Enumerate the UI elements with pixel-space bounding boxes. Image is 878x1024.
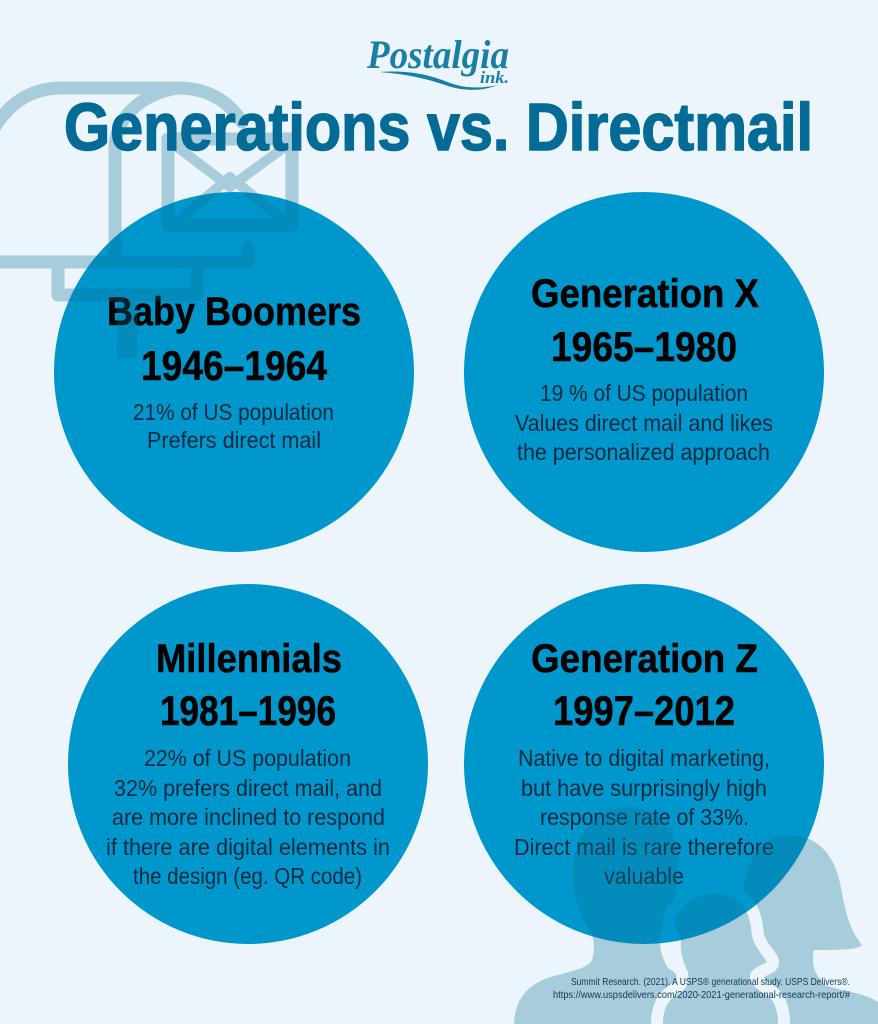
text: Generation Z facts: response rate of 33%. [540, 804, 749, 830]
heading: Baby Boomers: Baby Boomers [107, 290, 361, 334]
icon: family silhouettes [514, 807, 878, 1024]
heading: Millennials: Millennials [156, 637, 342, 681]
icon: woman silhouette right [744, 835, 878, 1024]
years: 1981–1996: 1981–1996 [160, 687, 336, 734]
logo: Postalgia ink.: ink. [480, 68, 509, 87]
text: Millennials facts: if there are digital elements in [106, 834, 390, 860]
text: Generation Z facts: valuable [604, 863, 684, 889]
citation [553, 976, 850, 1001]
panel: Millennials [68, 584, 428, 944]
text: Generation X facts [515, 380, 773, 465]
text: Generation Z facts [514, 745, 774, 889]
panel: Generation X [464, 192, 824, 552]
text: Generation Z facts: Direct mail is rare therefore [514, 834, 774, 860]
text: Generation X facts: Values direct mail and likes [515, 410, 773, 436]
logo: Postalgia ink.: Postalgia [366, 32, 509, 77]
icon: mailbox with envelope [0, 88, 292, 358]
text: Generation X facts: the personalized approach [517, 439, 770, 465]
text: Baby Boomers facts [133, 399, 334, 453]
text: Millennials facts: the design (eg. QR code) [133, 863, 362, 889]
heading: Generation Z: Generation Z [531, 637, 758, 681]
text: Millennials facts: 22% of US population [144, 745, 351, 771]
years: 1946–1964: 1946–1964 [141, 342, 328, 389]
text: Baby Boomers facts: Prefers direct mail [147, 427, 321, 453]
panel: Generation Z [464, 584, 824, 944]
text: Millennials facts [106, 745, 390, 889]
years: 1997–2012: 1997–2012 [553, 687, 735, 734]
text: Generation Z facts: but have surprisingly high [521, 775, 767, 801]
text: Generation Z facts: Native to digital marketing, [518, 745, 770, 771]
heading: Generation X: Generation X [531, 272, 759, 316]
years: 1965–1980: 1965–1980 [551, 323, 737, 370]
icon: child silhouette [663, 894, 778, 1024]
text: Baby Boomers facts: 21% of US population [133, 399, 334, 425]
text: Generation X facts: 19 % of US population [540, 380, 748, 406]
text: Millennials facts: are more inclined to respond [112, 804, 385, 830]
icon: adult silhouette left [514, 807, 678, 1024]
text: Millennials facts: 32% prefers direct mail, and [114, 775, 382, 801]
panel: Baby Boomers [54, 192, 414, 552]
